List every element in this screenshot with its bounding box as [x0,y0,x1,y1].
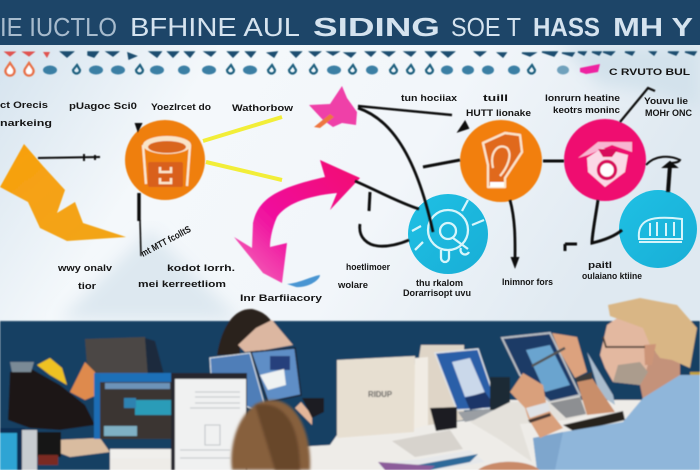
blue circle: bulb icon [408,194,488,274]
text labels: wwy onalv [57,263,113,274]
whiteboard panel [0,45,700,321]
man's hair [608,298,697,368]
text labels: tuill [483,93,508,104]
text labels: oulaiano ktiine [582,271,642,282]
small laptop far left [0,428,37,470]
text labels: Yoezlrcet do [151,102,211,113]
title [0,12,693,42]
label: legend: C RVUTO BUL [609,67,690,78]
laptop center left [94,373,175,458]
orange star shape [0,144,126,241]
arms and hands [510,373,563,438]
orange circle: bucket icon [125,120,205,200]
coffee cup [430,407,457,431]
title: SOE T [451,12,521,42]
text labels: kodot lorrh. [167,263,235,274]
beige laptops [337,345,464,438]
table [110,400,700,470]
wall [0,321,700,470]
text labels: Youvu lie [644,96,688,107]
man's face [600,315,652,385]
dark object behind hand [490,377,510,410]
icon row: small markers [5,52,696,76]
blue circle: chart icon [619,190,697,268]
white document laptop [171,373,247,470]
text labels: narkeing [0,118,52,129]
title: SIDING [313,12,440,42]
title: BFHINE AUL [130,12,300,42]
man with glasses [478,298,700,470]
text labels: Inr Barfiiacory [240,293,323,304]
black connector arrows [38,88,680,266]
text labels: Wathorbow [232,103,294,114]
text labels: thu rkalom [416,278,463,289]
header banner [0,0,700,45]
text labels: tior [78,281,96,292]
text labels: keotrs moninc [553,105,620,116]
text labels: wolare [337,280,368,291]
orange circle: ear icon [460,120,542,202]
text labels: paitl [588,260,612,271]
flower icon [309,86,357,128]
text labels: Inimnor fors [502,277,553,288]
background dark laptop [85,337,165,378]
person center back [217,309,293,355]
man's neck [640,350,680,400]
text labels: MOHr ONC [645,108,692,119]
text labels: mei kerreetliom [138,279,226,290]
beige laptops: RIDUP [368,390,393,399]
paper and tablet on table [378,430,485,470]
yellow arrows [203,117,282,180]
title: IE IUCTLO [0,12,117,42]
text labels: lonrurn heatine [545,93,620,104]
ear [644,344,656,365]
woman back of head [231,400,310,470]
text labels: hoetlimoer [346,262,390,273]
pink circle: face icon [564,119,646,201]
blue screen laptop [435,345,510,422]
office photo scene [0,298,700,470]
pink curved arrow [234,160,360,283]
person left, dark hair [8,358,110,465]
right laptop [470,333,587,462]
dual monitors [210,348,301,412]
text labels: pUagoc Sci0 [69,101,137,112]
title: MH Y [613,12,693,42]
text labels [0,93,692,304]
title: HASS [533,12,600,42]
yellow wall accent [690,372,700,378]
text labels: ct Orecis [0,100,48,111]
man's shirt [533,375,700,470]
blue brush mark [287,275,320,287]
text labels: tun hociiax [401,93,458,104]
sleeve behind [587,352,615,405]
text labels: mt MTT fcolltS [139,224,193,260]
glasses [603,337,645,347]
text labels: Dorarrisopt uvu [403,288,471,299]
text labels: HUTT lionake [466,108,531,119]
dark band [563,411,625,432]
